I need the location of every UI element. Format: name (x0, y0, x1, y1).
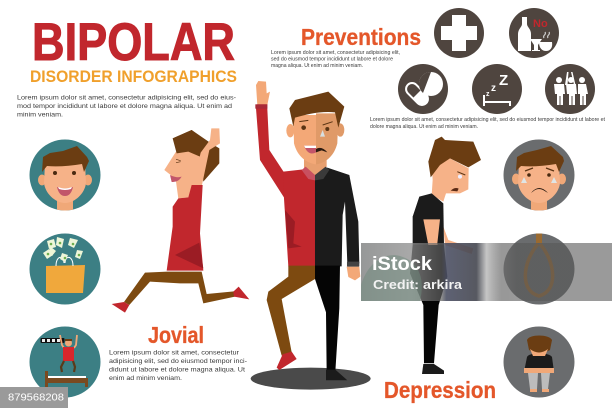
title: BIPOLAR (32, 13, 235, 72)
icon: no alcohol or coffee: No (533, 18, 548, 30)
intro text (17, 94, 236, 118)
preventions text: sed do eiusmod tempor incididunt ut labore et dolore (271, 56, 393, 62)
figure: jovial jumping man (112, 128, 249, 313)
icon: noose (504, 233, 574, 304)
preventions text (271, 50, 400, 69)
image id tag: 879568208 (8, 392, 64, 404)
intro text: mod tempor incididunt ut labore et dolore magna aliqua. Ut enim ad (17, 103, 232, 110)
image id tag (0, 387, 68, 408)
icon: sleep: z (491, 83, 496, 94)
jovial text: Lorem ipsum dolor sit amet, consectetur (109, 350, 240, 356)
icon: sleep (472, 64, 522, 114)
icon: sleep: z (486, 91, 490, 98)
icon: pills (398, 64, 448, 114)
watermark band (361, 243, 612, 301)
icon: happy face (30, 140, 100, 213)
icon: social group (545, 64, 595, 114)
heading: depression: Depression (384, 377, 496, 403)
intro text: minim veniam. (17, 112, 63, 118)
preventions body text: Lorem ipsum dolor sit amet, consectetur adipisicing elit, sed do eiusmod tempor incididunt ut labore et (370, 117, 605, 123)
watermark band: iStock (372, 254, 432, 275)
intro text: Lorem ipsum dolor sit amet, consectetur adipisicing elit, sed do eius- (17, 94, 236, 102)
preventions text: magna aliqua. Ut enim ad minim veniam. (271, 63, 363, 69)
icon: jumping on bed (30, 326, 100, 398)
icon: sitting depressed figure (504, 326, 574, 398)
figure: central split man with shadow (251, 81, 371, 390)
preventions body text: dolore magna aliqua. Ut enim ad minim veniam. (370, 124, 478, 130)
jovial text: adipisicing elit, sed do eiusmod tempor inci- (109, 358, 247, 365)
icon: no alcohol or coffee (509, 8, 559, 58)
jovial text: enim ad minim veniam. (109, 375, 182, 382)
heading: preventions: Preventions (301, 24, 421, 50)
preventions text: Lorem ipsum dolor sit amet, consectetur adipisicing elit, (271, 50, 400, 56)
icon: shopping bag with money (30, 234, 100, 304)
heading: jovial: Jovial (148, 322, 204, 348)
icon: medical cross (434, 8, 484, 58)
watermark band: Credit: arkira (373, 278, 463, 292)
icon: crying face (504, 140, 574, 213)
preventions body text (370, 117, 605, 130)
figure: depressed man (410, 137, 481, 374)
subtitle: DISORDER INFOGRAPHICS (30, 67, 237, 86)
icon: sleep: Z (499, 72, 508, 89)
jovial text (109, 350, 247, 382)
jovial text: didunt ut labore et dolore magna aliqua. Ut (109, 366, 245, 374)
